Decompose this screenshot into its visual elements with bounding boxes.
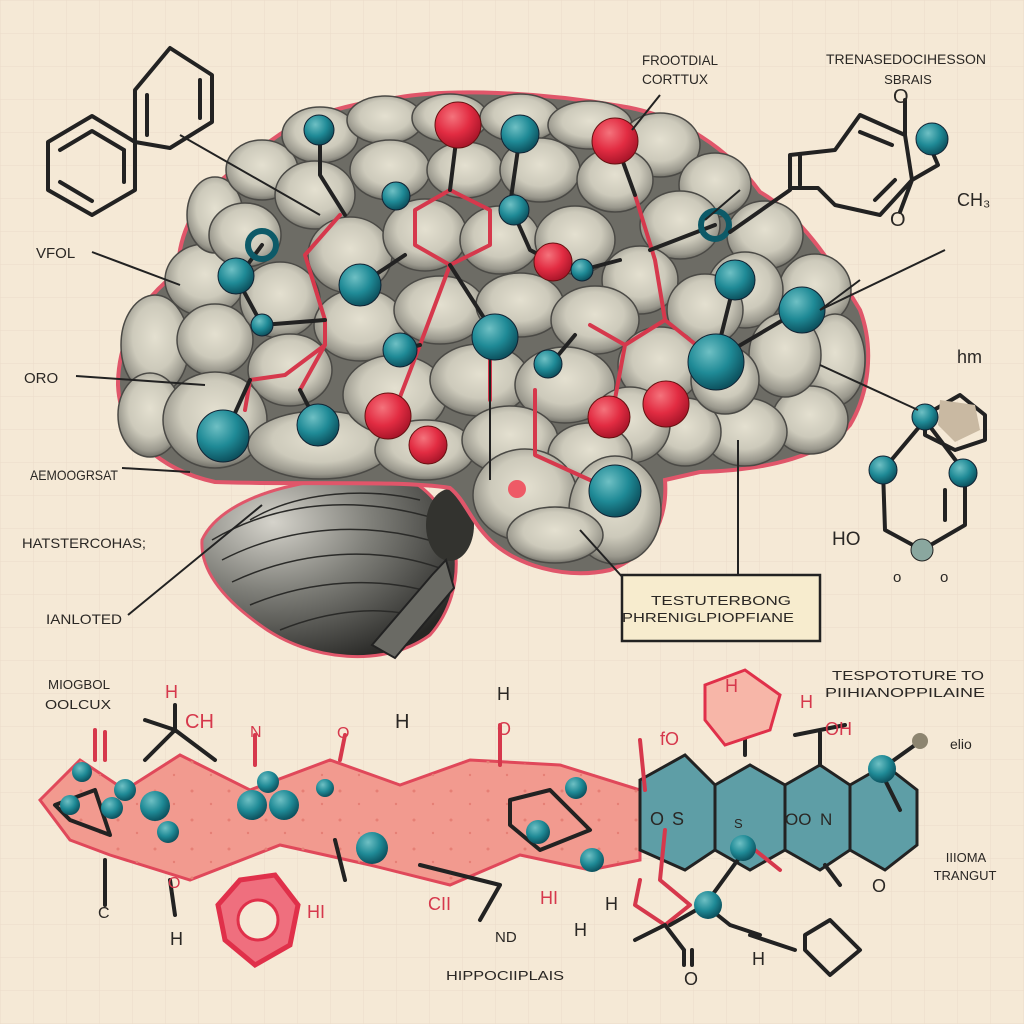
cerebellum xyxy=(202,478,456,657)
icon: top-left benzene rings xyxy=(48,48,212,215)
bottom labels: TESPOTOTURE TO xyxy=(832,668,984,683)
teal rings xyxy=(640,755,917,870)
bottom labels: H xyxy=(605,894,618,914)
label: cortex second line: CORTTUX xyxy=(642,71,709,87)
bottom labels: H xyxy=(170,929,183,949)
pink hexagon top xyxy=(705,670,780,745)
label: ianloted: IANLOTED xyxy=(46,611,122,627)
bottom labels: MIOGBOL xyxy=(48,677,110,692)
label: aemoogrsat: AEMOOGRSAT xyxy=(30,467,118,483)
bottom labels: O xyxy=(650,809,664,829)
icon: top-right molecule: O xyxy=(890,209,906,231)
icon: right molecule: HO xyxy=(832,529,860,550)
atoms xyxy=(60,733,928,919)
bottom labels: O xyxy=(168,875,180,892)
bottom labels: O xyxy=(337,725,349,742)
bottom labels: H xyxy=(497,684,510,704)
bottom labels: H xyxy=(752,949,765,969)
lower right chain xyxy=(635,925,795,965)
bottom labels: IIIOMA xyxy=(946,850,987,865)
label: oro: ORO xyxy=(24,370,58,387)
icon: right molecule: hm xyxy=(957,347,982,367)
bottom labels: S xyxy=(734,816,743,831)
bottom labels: OO xyxy=(785,810,811,829)
dark bonds xyxy=(225,125,800,435)
bottom labels: HI xyxy=(540,888,558,908)
icon: right molecule: o xyxy=(940,569,948,586)
bottom labels: N xyxy=(250,724,262,741)
red bonds xyxy=(245,190,715,480)
bottom labels: H xyxy=(165,682,178,702)
band bonds xyxy=(95,725,780,925)
icon: right molecule xyxy=(832,347,985,586)
atoms xyxy=(197,102,825,517)
bottom labels: CII xyxy=(428,894,451,914)
bottom labels: C xyxy=(98,905,110,922)
pink band xyxy=(40,755,640,885)
bottom labels: PIIHIANOPPILAINE xyxy=(825,685,985,700)
leader lines xyxy=(76,95,945,615)
label: vfol: VFOL xyxy=(36,245,75,262)
bottom labels: H xyxy=(395,711,409,733)
bottom labels xyxy=(45,668,996,989)
bottom labels: H xyxy=(725,676,738,696)
bottom labels: H xyxy=(800,692,813,712)
bottom labels: elio xyxy=(950,736,972,752)
bottom labels: fO xyxy=(660,729,679,749)
icon: top-right molecule: CH₃ xyxy=(957,190,990,210)
bottom labels: OH xyxy=(825,719,852,739)
bottom labels: O xyxy=(684,969,698,989)
label: top right: TRENASEDOCIHESSON xyxy=(826,51,986,67)
icon: top-right molecule xyxy=(730,86,990,232)
label: frontal cortex: FROOTDIAL xyxy=(642,52,718,68)
bottom labels: CH xyxy=(185,711,214,733)
bottom labels: HI xyxy=(307,902,325,922)
brain silhouette xyxy=(118,92,868,573)
bottom labels: TRANGUT xyxy=(934,868,996,883)
molecule overlay on brain xyxy=(197,102,825,517)
bottom labels: HIPPOCIIPLAIS xyxy=(446,968,564,983)
icon: right molecule: o xyxy=(893,569,901,586)
bottom labels: ND xyxy=(495,929,517,946)
callout box xyxy=(622,575,820,641)
bottom labels: N xyxy=(820,810,832,829)
callout box: PHRENIGLPIOPFIANE xyxy=(622,610,794,625)
callout box: TESTUTERBONG xyxy=(651,593,791,608)
brainstem xyxy=(372,489,474,658)
bottom molecular band xyxy=(40,670,928,975)
icon: top-right molecule: O xyxy=(893,86,909,108)
red ring xyxy=(218,875,298,965)
band speckle xyxy=(40,755,640,885)
bottom labels: OOLCUX xyxy=(45,697,111,712)
bottom labels: H xyxy=(574,920,587,940)
brain xyxy=(118,92,868,658)
label: top right second line: SBRAIS xyxy=(884,72,932,87)
bottom labels: S xyxy=(672,809,684,829)
bottom labels: O xyxy=(872,876,886,896)
label: hatstercohas: HATSTERCOHAS; xyxy=(22,535,146,551)
bottom labels: O xyxy=(497,719,511,739)
brain lobes xyxy=(118,94,865,564)
